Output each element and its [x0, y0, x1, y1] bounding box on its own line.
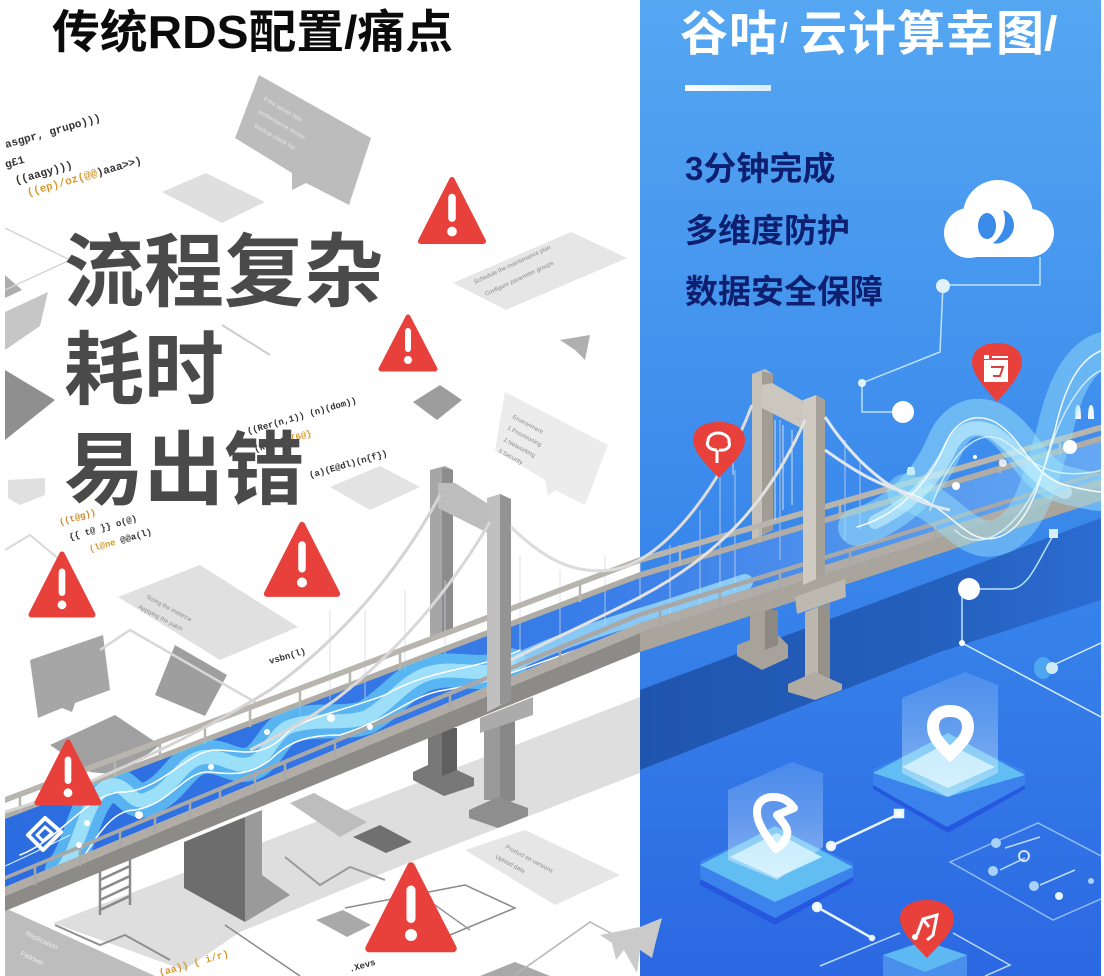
platform frame dots	[988, 838, 1094, 900]
big text: complicated, time consuming, error prone: 流程复杂	[64, 228, 384, 317]
panel: right google cloud side	[600, 0, 1103, 976]
heading: traditional RDS pain points: 传统RDS配置/痛点	[52, 6, 453, 58]
card text lines: if the server fails	[262, 97, 303, 124]
card text lines: Environment	[511, 414, 544, 436]
code fragments: asgpr, grupo)))	[4, 113, 102, 152]
platform: location O	[873, 672, 1025, 833]
heading: google cloud: 云计算幸图	[799, 8, 1044, 61]
rear tower upper pillars	[430, 369, 773, 640]
network nodes	[858, 279, 1094, 646]
blob node	[1034, 657, 1058, 679]
network lines from cloud	[862, 257, 1055, 643]
grey isometric cards	[5, 75, 627, 976]
big wave ribbons right	[857, 350, 1103, 540]
right hand hangers	[733, 420, 792, 520]
card text lines: 3.Security	[497, 448, 523, 466]
wave nodes	[76, 440, 1077, 848]
suspension cables	[5, 405, 950, 812]
deck front	[5, 470, 1103, 911]
card text lines: Failover	[19, 950, 45, 968]
card text lines: Applying the patch	[137, 604, 183, 633]
card text lines: Product en versions	[504, 844, 554, 875]
card text lines: Configure parameter groups	[484, 261, 555, 298]
big text: complicated, time consuming, error prone: 易出错	[64, 426, 304, 515]
platform: location G	[700, 762, 853, 925]
warning 4	[31, 554, 93, 615]
code fragments: ((t@g))	[58, 508, 97, 528]
benefits list: 多维度防护	[685, 212, 850, 249]
heading: google cloud: /	[1044, 8, 1057, 61]
card text lines: Sizing the instance	[145, 594, 193, 624]
road lines and hangers	[300, 420, 900, 720]
code fragments: ((Rer(n,1)) (n)(dom))	[246, 396, 358, 437]
heading: google cloud: /	[780, 17, 788, 48]
benefits list: 数据安全保障	[685, 273, 883, 310]
code fragments: g£1	[4, 155, 27, 172]
code fragments	[4, 113, 389, 976]
rear tower pillars lower	[413, 610, 788, 796]
dark river band	[640, 518, 1101, 770]
code fragments: (a)(E@dl)(n{f})	[308, 449, 389, 481]
benefits list: 3分钟完成	[685, 150, 835, 187]
pin: tree	[693, 422, 745, 478]
warning 2	[381, 317, 435, 369]
platform frame lines	[820, 642, 1103, 976]
warning 1	[421, 180, 483, 241]
code fragments: (kesr) {6@}	[253, 429, 313, 455]
big text: complicated, time consuming, error prone	[64, 228, 384, 515]
code fragments: ((ep)/oz(@@)aaa>>)	[26, 156, 143, 200]
code fragments: ((aagy)))	[14, 160, 74, 188]
code fragments: .Xevs	[348, 958, 377, 975]
card text lines: backup check list	[253, 124, 296, 152]
heading underline	[685, 85, 771, 91]
map pins	[693, 343, 1022, 958]
card text lines: performance review	[257, 110, 306, 141]
platform: music	[883, 941, 967, 976]
logo on road	[28, 818, 61, 850]
warning 6	[369, 866, 453, 948]
big text: complicated, time consuming, error prone: 耗时	[64, 326, 224, 415]
pin: calendar	[972, 343, 1022, 402]
card text lines: 1.Provisioning	[506, 425, 542, 448]
warning 5	[37, 742, 99, 803]
warning triangles	[31, 180, 483, 948]
panel: left traditional side	[4, 0, 640, 976]
code fragments: {{ t@ }} o(@)	[68, 514, 138, 543]
cloud icon	[944, 180, 1054, 258]
heading: google cloud: 谷咕	[680, 8, 777, 61]
warning 3	[267, 525, 337, 594]
road deck	[5, 440, 1103, 887]
front left tower	[438, 483, 533, 828]
card text lines: 2.Networking	[502, 437, 536, 459]
bird wing paper	[600, 918, 662, 973]
data wave ribbon on deck	[5, 582, 745, 870]
ground shadow band	[53, 697, 640, 970]
card text lines	[19, 97, 555, 968]
card text lines: Upload data	[494, 854, 526, 875]
front right tower	[762, 383, 846, 700]
code fragments: vsbn(l)	[268, 647, 307, 667]
code fragments: (l@ne @@a(l)	[88, 527, 153, 555]
card text lines: Replication	[24, 930, 59, 951]
benefits list	[685, 150, 883, 310]
pin: music	[900, 900, 954, 958]
bridge	[5, 350, 1103, 922]
connectors	[813, 810, 903, 940]
ladder	[100, 855, 130, 915]
rear rail	[5, 424, 1103, 819]
central pier	[184, 810, 290, 922]
card text lines: Schedule the maintenance plan	[473, 245, 552, 286]
